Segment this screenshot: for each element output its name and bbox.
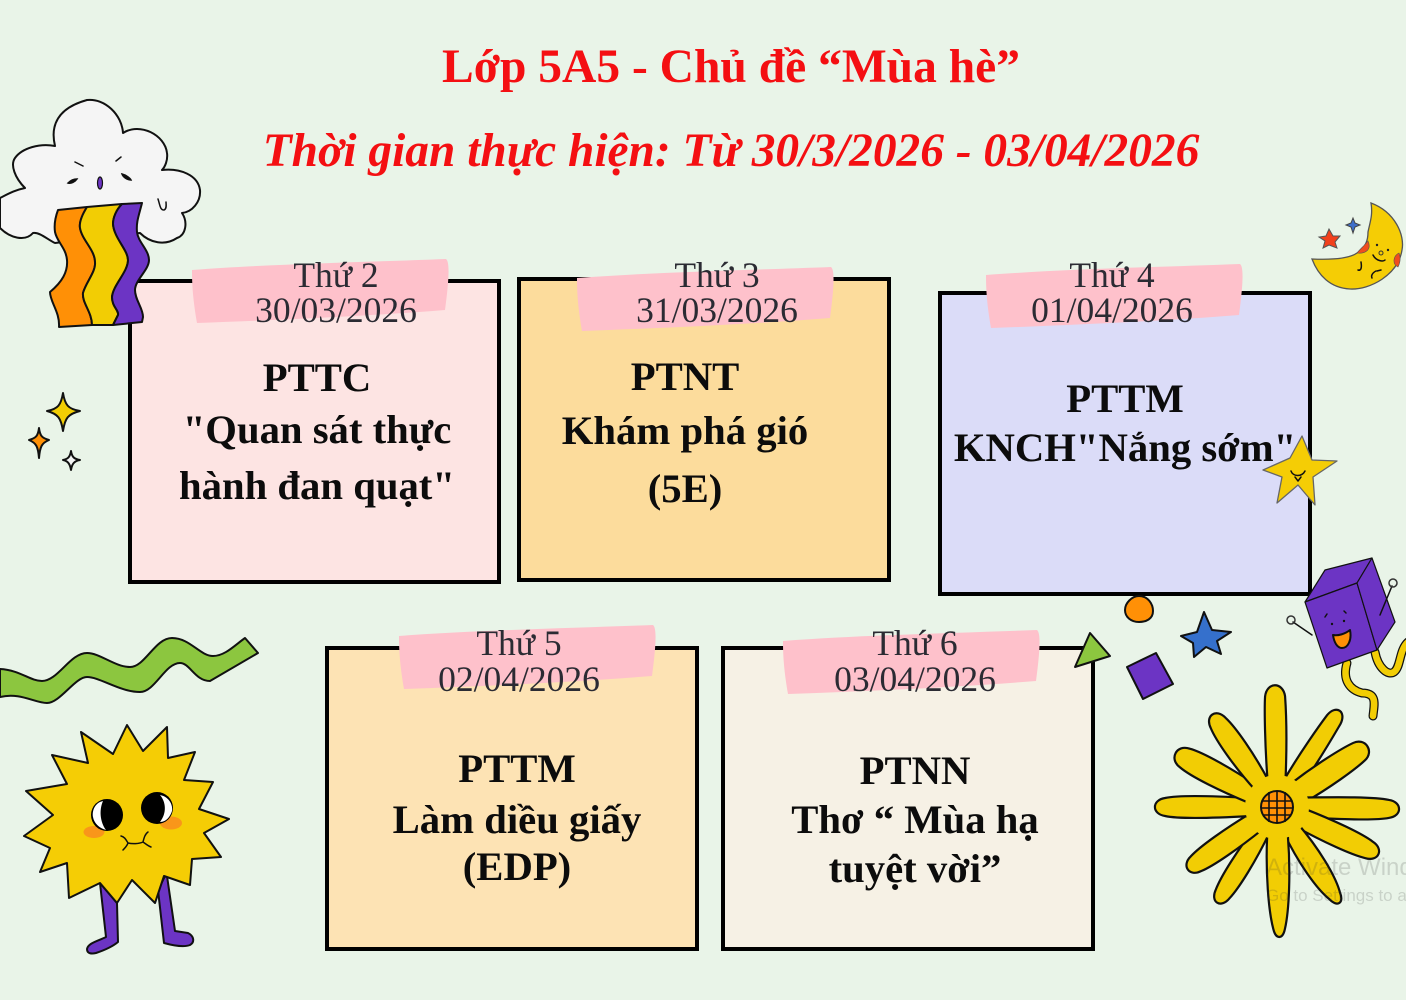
panel: Tuesday: (5E) — [648, 466, 722, 511]
panel: Wednesday: KNCH"Nắng sớm" — [954, 425, 1296, 470]
panel: Thursday — [327, 623, 697, 949]
panel: Monday: "Quan sát thực — [183, 407, 451, 452]
panel: Friday — [723, 623, 1093, 949]
panel: Friday: tuyệt vời” — [829, 846, 1001, 891]
subtitle: time period: Thời gian thực hiện: Từ 30/3/2026 - 03/04/2026 — [263, 125, 1200, 177]
panel: Thursday: Làm diều giấy — [393, 797, 641, 842]
panel: Monday: Thứ 2 — [293, 255, 379, 295]
watermark — [1266, 854, 1406, 905]
panel: Friday: Thơ “ Mùa hạ — [791, 797, 1039, 842]
icon: cloud with rainbow — [0, 100, 200, 327]
icon: green triangle — [1075, 633, 1110, 667]
icon: sparkles — [29, 393, 80, 470]
panel: Tuesday: Khám phá gió — [562, 408, 808, 453]
panel: Monday: hành đan quạt" — [179, 463, 455, 508]
panel: Thursday: 02/04/2026 — [438, 659, 600, 699]
panel: Wednesday: Thứ 4 — [1069, 255, 1155, 295]
panel: Thursday: Thứ 5 — [476, 623, 562, 663]
panel: Wednesday: PTTM — [1066, 376, 1184, 421]
panel: Tuesday: 31/03/2026 — [636, 290, 798, 330]
panel: Monday — [130, 255, 499, 582]
icon: purple cube character — [1287, 558, 1406, 716]
icon: sun character — [24, 725, 229, 954]
icon: purple square — [1127, 653, 1173, 699]
panel: Friday: PTNN — [860, 748, 970, 793]
panel: Wednesday — [940, 255, 1310, 594]
panel: Wednesday: 01/04/2026 — [1031, 290, 1193, 330]
icon: crescent moon with stars — [1312, 203, 1403, 289]
title: Lớp 5A5 - Chủ đề “Mùa hè” — [442, 41, 1020, 93]
panel: Tuesday: PTNT — [631, 354, 739, 399]
icon: green wave — [0, 638, 258, 703]
panel: Tuesday — [519, 255, 889, 580]
icon: blue star — [1181, 612, 1231, 657]
panel: Thursday: (EDP) — [463, 844, 571, 889]
panel: Friday: 03/04/2026 — [834, 659, 996, 699]
icon: yellow flower — [1155, 685, 1399, 937]
icon: smiling star — [1263, 436, 1337, 505]
panel: Tuesday: Thứ 3 — [674, 255, 760, 295]
panel: Friday: Thứ 6 — [872, 623, 958, 663]
panel: Monday: 30/03/2026 — [255, 290, 417, 330]
panel: Monday: PTTC — [263, 355, 371, 400]
panel: Thursday: PTTM — [458, 746, 576, 791]
icon: orange circle — [1125, 596, 1153, 622]
